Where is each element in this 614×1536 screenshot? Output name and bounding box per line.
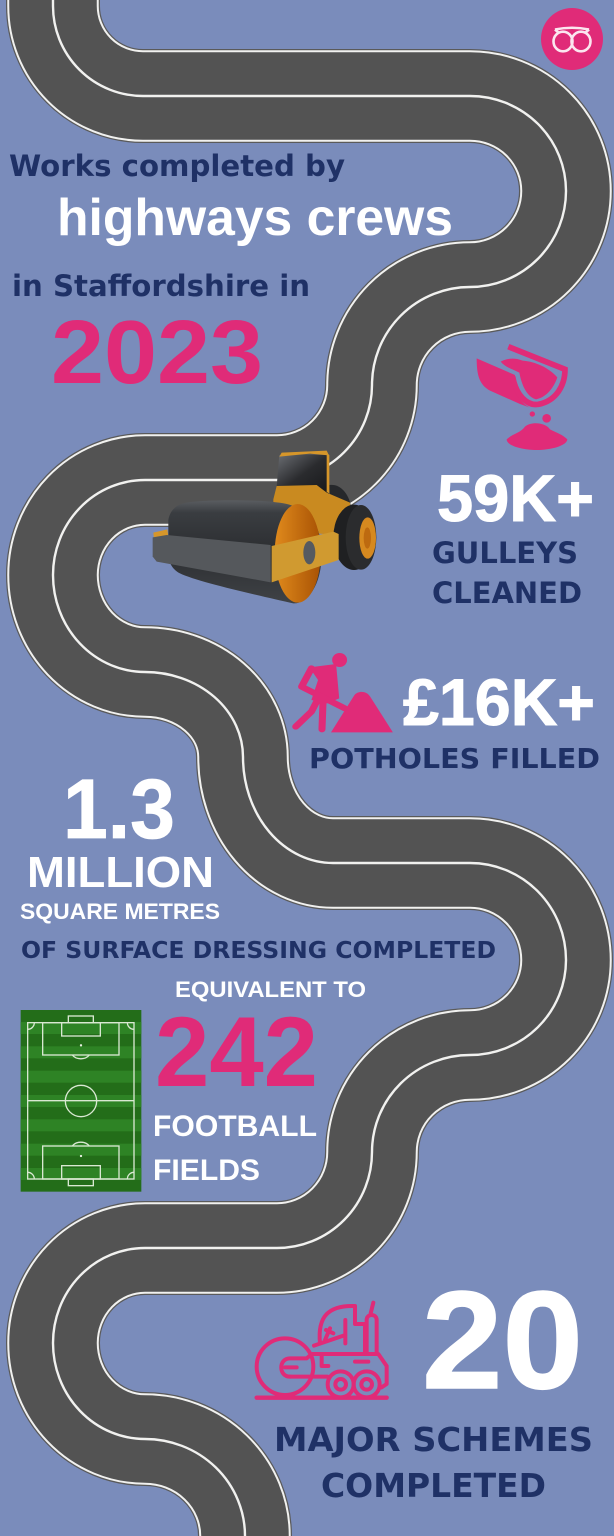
icon: worker shovelling xyxy=(296,653,393,732)
stat: gulleys cleaned: GULLEYS xyxy=(432,536,578,570)
stat: surface dressing: MILLION xyxy=(27,848,214,897)
stat: surface dressing xyxy=(20,762,496,1002)
stat: major schemes: 20 xyxy=(422,1263,583,1418)
stat: major schemes: MAJOR SCHEMES xyxy=(274,1420,593,1459)
stat: potholes filled xyxy=(309,665,600,775)
title: 2023 xyxy=(51,303,263,403)
stat: surface dressing: 1.3 xyxy=(63,762,175,856)
stat: gulleys cleaned xyxy=(432,461,594,610)
stat: football fields: FIELDS xyxy=(153,1154,260,1187)
stat: surface dressing: SQUARE METRES xyxy=(20,899,220,924)
icon: gully scoop xyxy=(477,347,567,450)
stat: major schemes xyxy=(274,1263,593,1505)
icon: roller outline xyxy=(257,1303,387,1398)
stat: potholes filled: £16K+ xyxy=(403,665,595,739)
stat: potholes filled: POTHOLES FILLED xyxy=(309,742,600,775)
stat: surface dressing: EQUIVALENT TO xyxy=(175,977,366,1002)
stat: football fields: FOOTBALL xyxy=(153,1110,317,1143)
title xyxy=(9,149,453,403)
title: highways crews xyxy=(57,189,453,247)
stat: gulleys cleaned: CLEANED xyxy=(432,576,582,610)
title: Works completed by xyxy=(9,149,345,183)
stat: gulleys cleaned: 59K+ xyxy=(437,461,594,535)
icon: football pitch xyxy=(21,1010,141,1192)
stat: surface dressing: OF SURFACE DRESSING COMPLETED xyxy=(21,938,496,964)
stat: football fields xyxy=(153,996,318,1187)
logo: Staffordshire knot badge xyxy=(541,8,603,70)
stat: major schemes: COMPLETED xyxy=(321,1466,546,1505)
stat: football fields: 242 xyxy=(155,996,318,1107)
road roller illustration xyxy=(153,451,376,603)
title: in Staffordshire in xyxy=(12,269,310,303)
